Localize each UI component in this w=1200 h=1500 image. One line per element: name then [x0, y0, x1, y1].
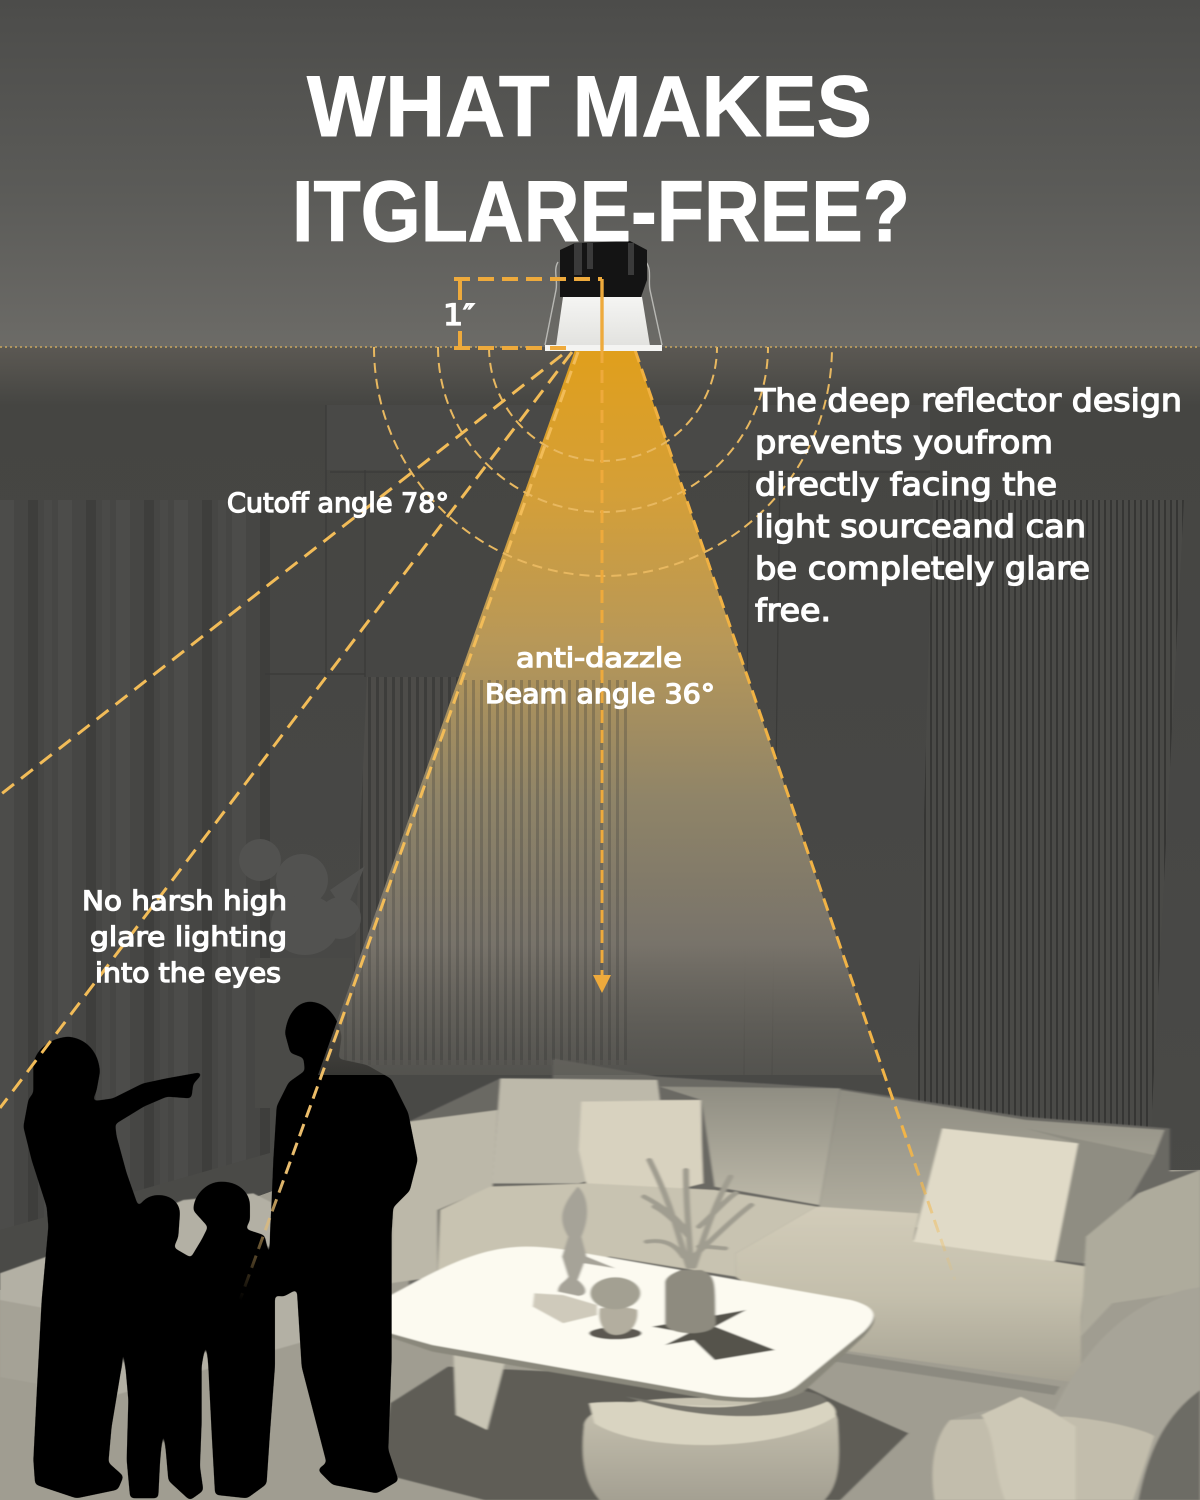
fixture: white reflector [556, 297, 650, 346]
light beam [318, 350, 884, 1075]
light fixture [545, 241, 662, 351]
cutoff line lower [0, 352, 572, 1108]
silhouette: family [25, 1003, 416, 1498]
left pillow [579, 1100, 703, 1198]
ceiling line [0, 346, 1200, 348]
text: reflector description: light sourceand can [755, 509, 1086, 545]
text: no harsh glare: glare lighting [90, 922, 287, 953]
sofa back shell [409, 1058, 1200, 1290]
silhouette: father [272, 1003, 416, 1492]
beam edge left [338, 352, 578, 1030]
table top [388, 1247, 873, 1398]
text: reflector description: be completely glare [755, 551, 1090, 587]
center arrow [593, 279, 611, 993]
right back cushion [819, 1090, 1164, 1263]
armchair [932, 1287, 1200, 1500]
table floor shadow [380, 1367, 908, 1500]
text: reflector description [754, 383, 1182, 629]
silhouette: child two [193, 1183, 273, 1497]
text: beam angle [485, 643, 715, 710]
cutoff line upper [0, 355, 562, 795]
table leg [453, 1347, 506, 1430]
room: right slatted wall [915, 500, 1184, 1130]
beam slat texture [330, 680, 627, 1060]
vase [665, 1270, 716, 1333]
title: WHAT MAKES [307, 59, 872, 155]
text: reflector description: prevents youfrom [755, 425, 1053, 461]
room: left curtain [0, 500, 270, 1230]
room: recessed ceiling panel [326, 405, 930, 470]
right seat [736, 1207, 1086, 1383]
background: ceiling [0, 0, 1200, 347]
armchair right side [1138, 1390, 1200, 1500]
dried plant [644, 1160, 751, 1267]
sofa right arm [1081, 1170, 1200, 1337]
title: ITGLARE-FREE? [292, 164, 910, 260]
text: no harsh glare: No harsh high [82, 886, 287, 917]
text: reflector description: The deep reflector design [754, 383, 1182, 419]
ottoman top [589, 1390, 836, 1445]
arcs: dashed beam rings [374, 347, 832, 576]
room: left sofa block [0, 1193, 333, 1397]
left seat [438, 1183, 817, 1277]
statue [558, 1187, 615, 1296]
text: reflector description: directly facing the [755, 467, 1057, 503]
fixture: flange [545, 345, 662, 351]
fixture: black heat sink [560, 241, 647, 297]
sofa base [825, 1352, 1060, 1395]
fixture: fins [574, 243, 634, 275]
room: dark floor strip by curtain [0, 1130, 440, 1290]
table shadow on ottoman [626, 1390, 827, 1416]
right pillow [913, 1128, 1078, 1262]
text: reflector description: free. [755, 593, 831, 629]
room: wall panel lines [265, 405, 930, 1075]
ottoman [583, 1395, 839, 1500]
silhouette: child one [123, 1197, 208, 1498]
flower pot [599, 1307, 638, 1335]
room: central slatted wall [350, 677, 627, 1065]
pot shadow [589, 1327, 642, 1339]
flower head [590, 1277, 640, 1309]
sofa left arm [390, 1110, 498, 1283]
silhouette: mother pointing [25, 1038, 200, 1497]
fixture: spring clips [545, 262, 662, 345]
books [533, 1293, 597, 1323]
dimension label: 1″ [443, 298, 475, 332]
left back cushion [492, 1078, 702, 1183]
text: beam angle: anti-dazzle [516, 643, 682, 674]
text: no harsh glare: into the eyes [95, 958, 281, 989]
text: no harsh glare [82, 886, 287, 989]
room: sofa and table group [380, 1058, 1200, 1500]
plant shadow on table [652, 1310, 775, 1360]
room: sculpture on pedestal [239, 839, 365, 1108]
title [292, 59, 910, 260]
middle back cushion [660, 1087, 840, 1205]
room: floor [0, 1130, 1200, 1500]
beam edge right [635, 350, 955, 1280]
dimension bracket [454, 279, 602, 348]
table edge [388, 1249, 874, 1402]
text: cutoff angle: Cutoff angle 78° [227, 488, 449, 519]
throw blanket [981, 1397, 1076, 1500]
text: beam angle: Beam angle 36° [485, 679, 715, 710]
armchair seat [932, 1417, 1154, 1500]
beam edge left over silhouette [240, 1030, 338, 1300]
rear right cushion [1026, 1128, 1154, 1263]
background: room wall [0, 347, 1200, 1247]
